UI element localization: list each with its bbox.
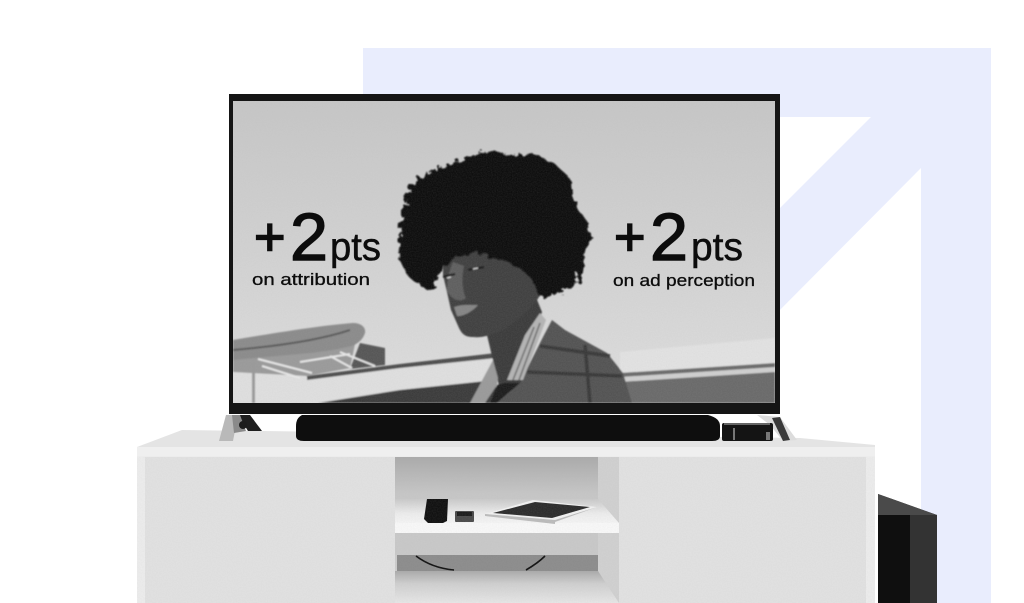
small device	[455, 511, 474, 522]
left door	[145, 457, 395, 603]
stat: attribution: 2	[290, 200, 328, 275]
stat: attribution: +	[254, 207, 286, 267]
collar	[507, 313, 546, 380]
tablet	[485, 500, 597, 524]
screen grain	[321, 152, 628, 402]
stat: attribution: pts	[330, 226, 381, 269]
right door	[619, 457, 866, 603]
cabinet top	[137, 430, 875, 456]
infographic scene	[137, 48, 991, 603]
cabinet body	[137, 456, 875, 603]
television	[229, 94, 780, 414]
stat: ad perception: +	[614, 207, 646, 267]
remote control	[424, 499, 448, 523]
stat: attribution: on attribution	[252, 270, 370, 289]
background arrow shape	[363, 48, 991, 603]
streaming box	[722, 423, 773, 441]
neck	[487, 290, 542, 390]
stat: ad perception: pts	[691, 226, 743, 269]
face	[443, 250, 540, 337]
center shelves	[395, 457, 619, 603]
hair	[398, 150, 591, 297]
soundbar	[296, 415, 720, 441]
speaker box	[878, 494, 937, 603]
stat: ad perception	[613, 200, 755, 290]
tv stand foot: right	[757, 415, 797, 441]
tv screen photo	[233, 101, 775, 403]
stat: attribution	[252, 200, 381, 289]
stat: ad perception: on ad perception	[613, 271, 755, 290]
stat: ad perception: 2	[650, 200, 688, 275]
tv cabinet	[137, 430, 875, 603]
jacket	[497, 320, 632, 403]
tv bezel	[229, 94, 780, 414]
tv stand foot: left	[219, 415, 262, 441]
cabinet grain	[137, 457, 875, 603]
